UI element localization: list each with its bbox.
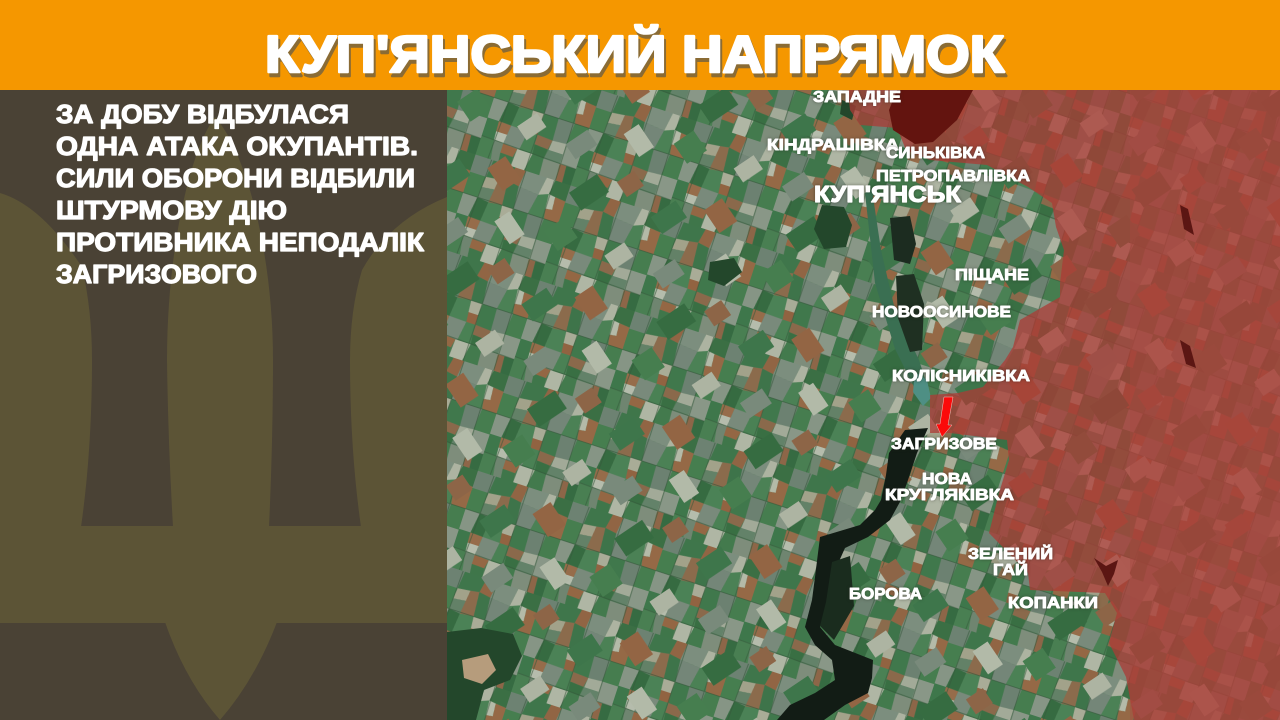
- map labels: [767, 89, 1098, 612]
- label: Західне: ЗАПАДНЕ: [813, 89, 901, 106]
- ponds: [1094, 205, 1196, 586]
- label: Копанки: КОПАНКИ: [1008, 595, 1098, 612]
- label: Кіндрашівка: КІНДРАШІВКА: [767, 137, 900, 154]
- label: Нова Кругляківка: КРУГЛЯКІВКА: [885, 487, 1015, 504]
- label: Нова Кругляківка: [885, 471, 1015, 504]
- label: Нова Кругляківка: НОВА: [922, 471, 972, 488]
- label: Синьківка: СИНЬКІВКА: [886, 145, 985, 162]
- text block: daily summary: ЗАГРИЗОВОГО: [56, 261, 257, 289]
- forest in red zone: [889, 90, 973, 144]
- title: КУП'ЯНСЬКИЙ НАПРЯМОК: [265, 25, 1004, 84]
- header bar: [0, 0, 1280, 90]
- label: Новоосинове: НОВООСИНОВЕ: [872, 304, 1011, 321]
- red zone east tint: [1130, 90, 1280, 720]
- forests: [447, 100, 856, 720]
- text block: daily summary: ШТУРМОВУ ДІЮ: [56, 197, 287, 225]
- background panel: [0, 90, 447, 720]
- red occupied zone: [848, 90, 1280, 720]
- label: Зелений Гай: [968, 544, 1053, 579]
- river: [777, 428, 928, 720]
- text block: daily summary: ЗА ДОБУ ВІДБУЛАСЯ: [56, 101, 349, 129]
- label: Зелений Гай: ЗЕЛЕНИЙ: [968, 544, 1053, 563]
- arrow: attack direction: [936, 397, 953, 437]
- satellite map: [447, 90, 1280, 720]
- label: Петропавлівка: ПЕТРОПАВЛІВКА: [876, 168, 1030, 185]
- label: Борова: БОРОВА: [849, 586, 922, 603]
- text block: daily summary: ОДНА АТАКА ОКУПАНТІВ.: [56, 133, 418, 161]
- text block: daily summary: СИЛИ ОБОРОНИ ВІДБИЛИ: [56, 165, 415, 193]
- text block: daily summary: ПРОТИВНИКА НЕПОДАЛІК: [56, 229, 424, 257]
- label: Зелений Гай: ГАЙ: [993, 560, 1028, 579]
- label: Куп'янськ: КУП'ЯНСЬК: [814, 181, 962, 207]
- text block: daily summary: [56, 101, 424, 289]
- label: Колісниківка: КОЛІСНИКІВКА: [892, 368, 1031, 385]
- label: Загризове: ЗАГРИЗОВЕ: [891, 436, 997, 453]
- label: Піщане: ПІЩАНЕ: [955, 267, 1029, 284]
- icon: trident emblem: [0, 117, 447, 720]
- river valley north: [865, 190, 931, 406]
